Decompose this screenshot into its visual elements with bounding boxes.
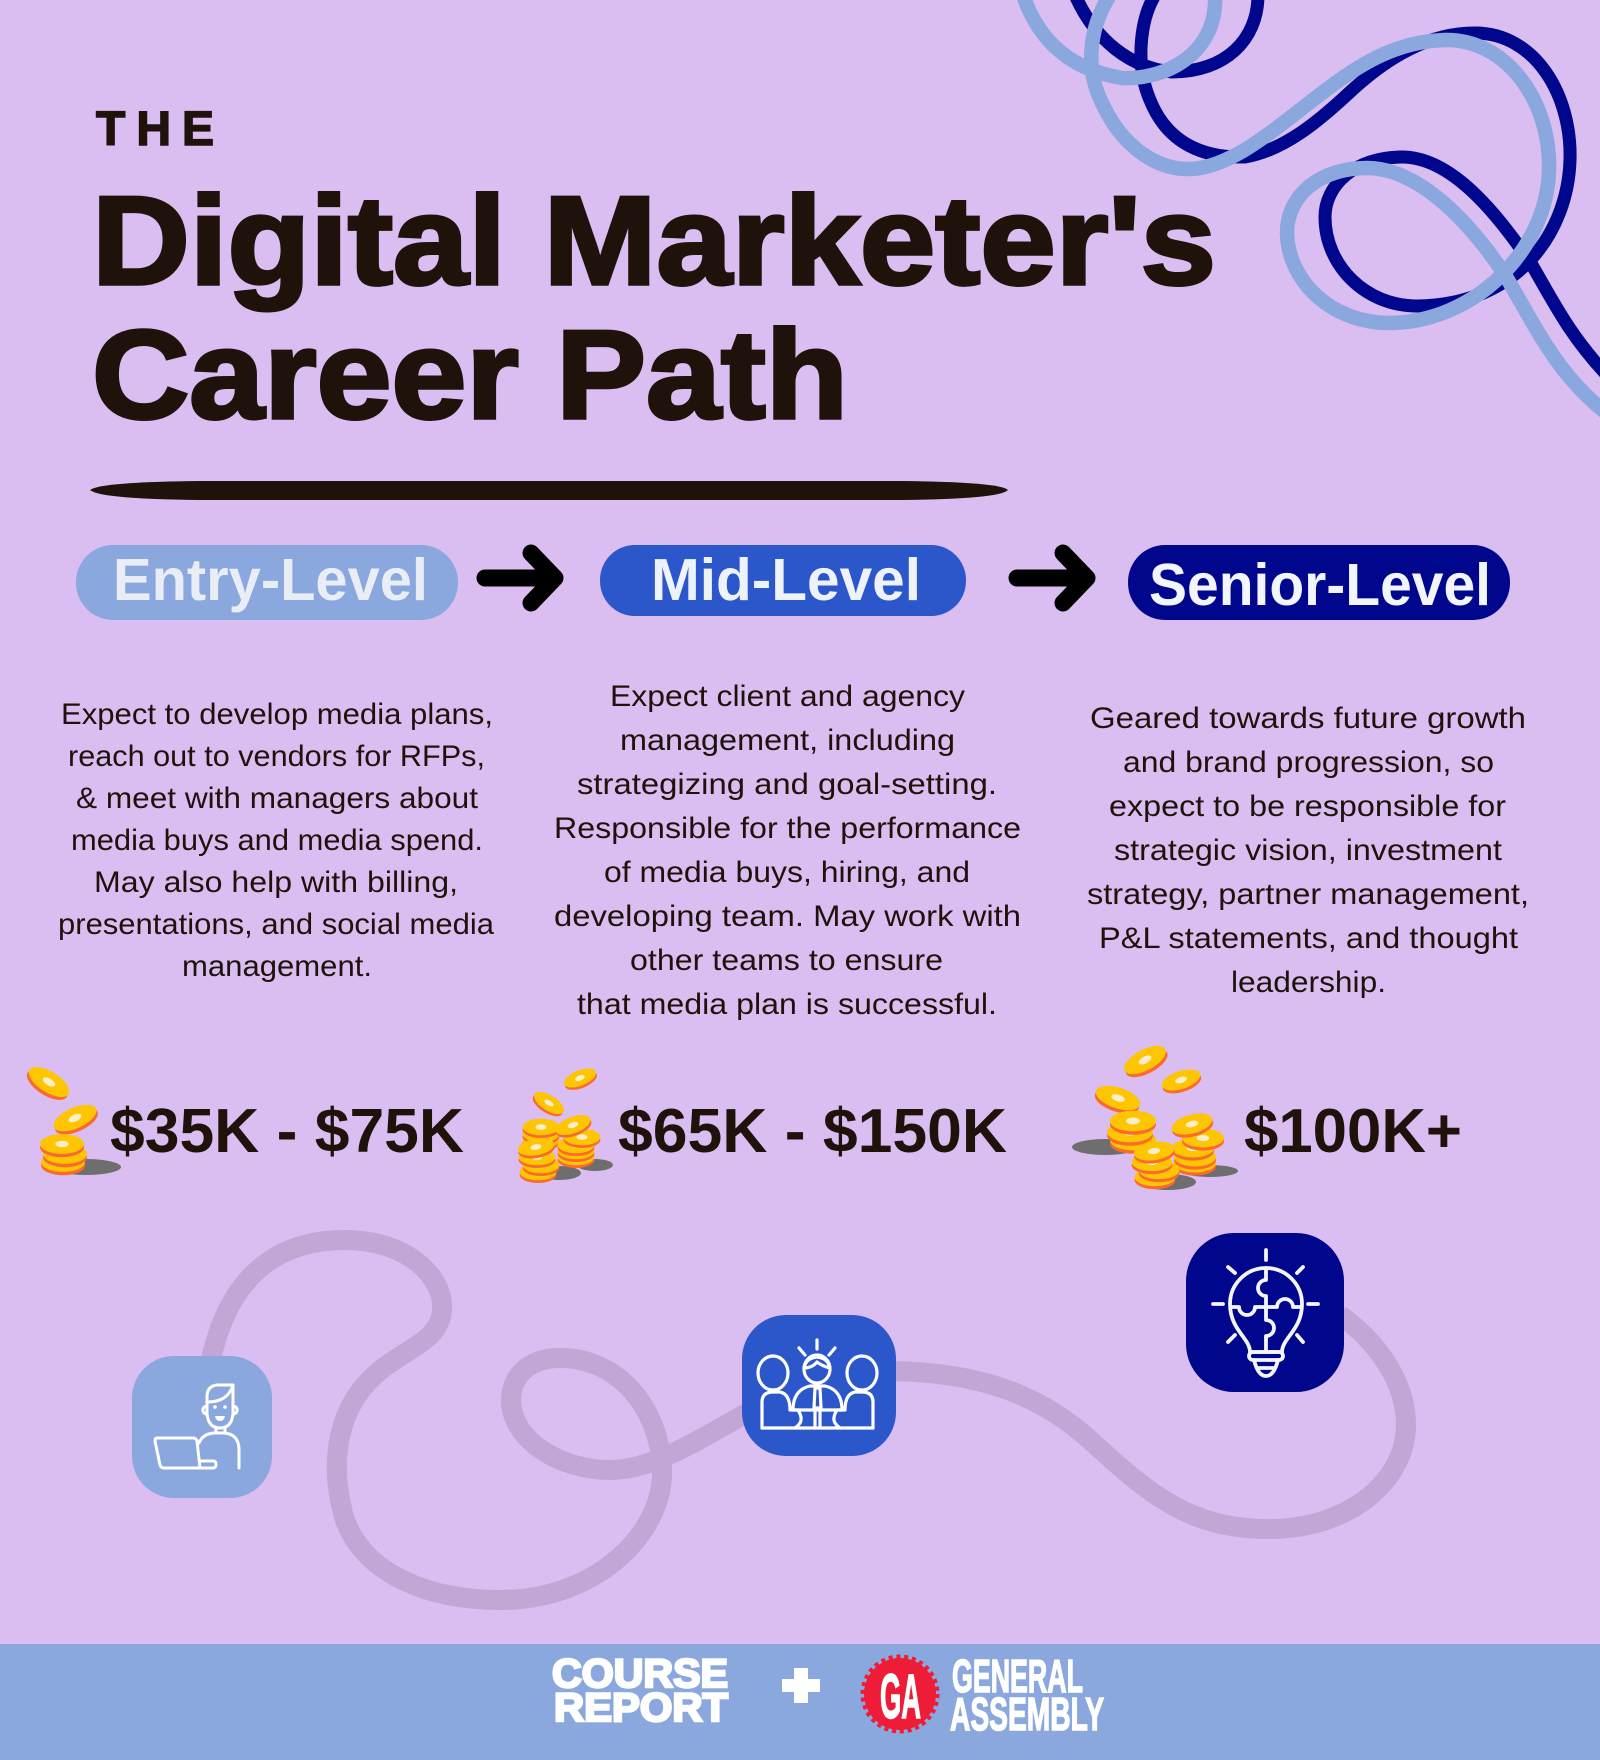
logo: general assembly	[863, 1650, 1104, 1740]
decorative ribbons	[1023, 0, 1600, 412]
level pill: senior-level: Senior-Level	[1149, 552, 1491, 618]
logo: course report: REPORT	[554, 1686, 728, 1730]
text block: entry-level description: Expect to develop media plans,	[61, 698, 493, 731]
text block: mid-level description: of media buys, hiring, and	[604, 856, 970, 889]
text block: mid-level description: Responsible for the performance	[554, 812, 1021, 845]
text block: senior-level description: strategy, partner management,	[1087, 878, 1529, 911]
text block: entry-level description: media buys and media spend.	[71, 824, 483, 857]
text block: entry-level description: management.	[182, 950, 372, 983]
text block: entry-level description: reach out to vendors for RFPs,	[68, 740, 485, 773]
text block: mid-level description	[554, 680, 1021, 1021]
text block: entry-level description: presentations, and social media	[58, 908, 494, 941]
text block: senior-level description: P&L statements, and thought	[1099, 922, 1519, 955]
arrow: entry to mid	[485, 553, 555, 603]
title	[92, 170, 1216, 445]
text block: senior-level description: Geared towards future growth	[1090, 702, 1526, 735]
heading: the: THE	[96, 103, 214, 156]
footer band	[0, 1644, 1600, 1760]
salary: mid: $65K - $150K	[618, 1097, 1007, 1166]
logo: course report: COURSE	[552, 1652, 728, 1696]
text block: entry-level description: May also help with billing,	[94, 866, 458, 899]
text block: senior-level description	[1087, 702, 1529, 999]
title: Career Path	[92, 304, 848, 445]
icon: puzzle light bulb	[1186, 1233, 1344, 1392]
salary: senior: $100K+	[1244, 1097, 1462, 1166]
level pill: mid-level	[600, 545, 966, 616]
text block: entry-level description	[58, 698, 494, 983]
text block: entry-level description: & meet with managers about	[76, 782, 479, 815]
text block: senior-level description: expect to be responsible for	[1109, 790, 1506, 823]
text block: mid-level description: Expect client and agency	[610, 680, 965, 713]
text block: mid-level description: developing team. May work with	[554, 900, 1021, 933]
text block: mid-level description: strategizing and goal-setting.	[577, 768, 997, 801]
title underline	[90, 481, 1008, 500]
icon: coins mid	[516, 1065, 613, 1183]
text block: senior-level description: strategic vision, investment	[1114, 834, 1503, 867]
logo: general assembly: ASSEMBLY	[950, 1688, 1104, 1740]
text block: senior-level description: leadership.	[1231, 966, 1386, 999]
text block: mid-level description: other teams to ensure	[630, 944, 943, 977]
text block: mid-level description: management, including	[620, 724, 955, 757]
text block: mid-level description: that media plan is successful.	[577, 988, 997, 1021]
icon: coins senior	[1072, 1040, 1238, 1190]
title: Digital Marketer's	[92, 170, 1216, 311]
level pill: entry-level: Entry-Level	[113, 547, 428, 613]
logo: course report	[552, 1652, 728, 1730]
logo: general assembly: GENERAL	[952, 1650, 1083, 1702]
logo: general assembly: GA	[880, 1662, 921, 1732]
salary: entry: $35K - $75K	[110, 1097, 464, 1166]
text block: senior-level description: and brand progression, so	[1123, 746, 1494, 779]
level pill: mid-level: Mid-Level	[651, 547, 921, 613]
career path line	[208, 1240, 1406, 1600]
icon: team meeting	[742, 1315, 896, 1456]
plus sign	[782, 1668, 820, 1703]
icon: coins entry	[22, 1061, 121, 1175]
arrow: mid to senior	[1017, 553, 1087, 603]
icon: person at laptop	[132, 1356, 272, 1498]
